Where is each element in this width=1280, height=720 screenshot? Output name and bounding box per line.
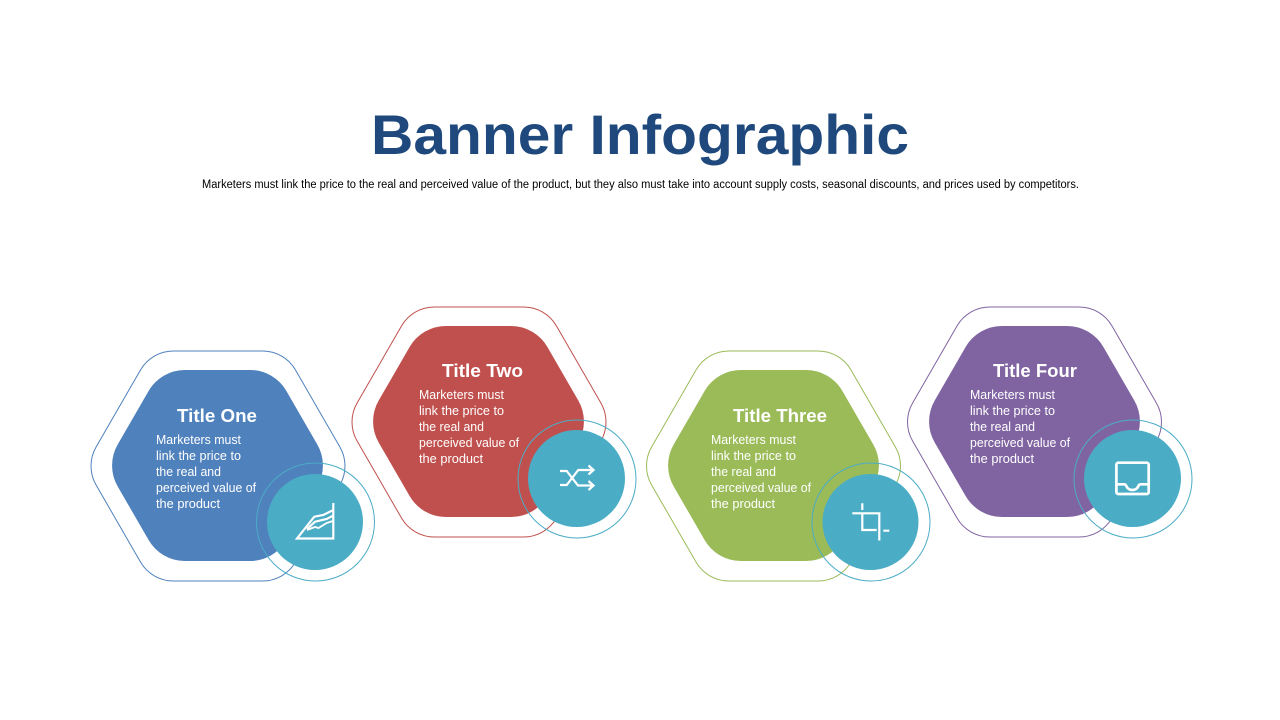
body text: the product xyxy=(419,452,484,466)
body text: the product xyxy=(156,497,221,511)
outer hexagon outline xyxy=(908,307,1161,537)
body text: perceived value of xyxy=(711,481,812,495)
filled hexagon xyxy=(112,370,323,561)
body text: perceived value of xyxy=(419,436,520,450)
body text: perceived value of xyxy=(156,481,257,495)
icon: shuffle xyxy=(560,466,594,490)
body text: the real and xyxy=(711,465,776,479)
outer hexagon outline xyxy=(91,351,345,581)
body text: link the price to xyxy=(970,404,1055,418)
outer hexagon outline xyxy=(352,307,606,537)
body text: perceived value of xyxy=(970,436,1071,450)
body text xyxy=(156,433,257,511)
title: Banner Infographic xyxy=(371,103,909,166)
filled hexagon xyxy=(373,326,584,517)
body text xyxy=(419,388,520,466)
heading: Title Three xyxy=(733,406,827,426)
circle xyxy=(528,430,625,527)
body text: the product xyxy=(970,452,1035,466)
body text: the real and xyxy=(156,465,221,479)
panel: title one xyxy=(91,351,374,581)
body text: Marketers must xyxy=(156,433,242,447)
ring xyxy=(256,463,374,581)
body text: Marketers must xyxy=(711,433,797,447)
body text: Marketers must xyxy=(970,388,1056,402)
body text: the real and xyxy=(419,420,484,434)
outer hexagon outline xyxy=(647,351,900,581)
ring xyxy=(518,420,636,538)
circle xyxy=(267,474,363,570)
filled hexagon xyxy=(929,326,1140,517)
body text: link the price to xyxy=(419,404,504,418)
panel: title three xyxy=(647,351,930,581)
icon: crop xyxy=(852,503,889,540)
body text xyxy=(970,388,1071,466)
filled hexagon xyxy=(668,370,879,561)
heading: Title Two xyxy=(442,361,523,381)
icon: tray xyxy=(1116,463,1149,494)
ring xyxy=(812,463,930,581)
body text: link the price to xyxy=(711,449,796,463)
heading: Title One xyxy=(177,406,257,426)
panel: title two xyxy=(352,307,636,538)
body text xyxy=(711,433,812,511)
circle xyxy=(1084,430,1181,527)
circle xyxy=(822,474,918,570)
body text: link the price to xyxy=(156,449,241,463)
ring xyxy=(1074,420,1192,538)
panel: title four xyxy=(908,307,1192,538)
body text: Marketers must xyxy=(419,388,505,402)
heading: Title Four xyxy=(993,361,1077,381)
icon: area chart xyxy=(297,503,333,538)
body text: the real and xyxy=(970,420,1035,434)
subtitle: Marketers must link the price to the real and perceived value of the product, but they also must take into account supply costs, seasonal discounts, and prices used by competitors. xyxy=(202,179,1079,191)
body text: the product xyxy=(711,497,776,511)
